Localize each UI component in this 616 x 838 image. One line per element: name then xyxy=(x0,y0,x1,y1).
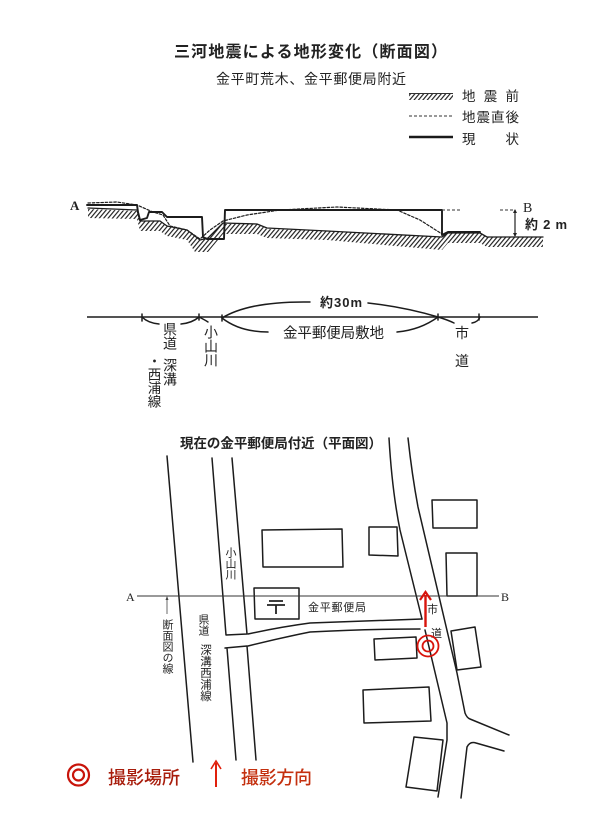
prefectural road label xyxy=(197,614,212,702)
legend: just after earthquake: 地震直後 xyxy=(462,110,520,125)
post office building xyxy=(254,588,299,619)
city road label: 市 xyxy=(427,603,438,616)
label B: B xyxy=(501,590,509,604)
section line pointer xyxy=(166,596,168,614)
dimension arcs xyxy=(142,302,480,332)
prefectural road label: 深溝 xyxy=(162,358,178,386)
post office label: 金平郵便局 xyxy=(308,601,366,614)
height marker xyxy=(513,209,517,237)
prefectural road label: 県道 xyxy=(197,614,210,636)
city road label: 道 xyxy=(431,626,442,640)
red arrow: shooting direction xyxy=(420,592,431,627)
width label: 約30m xyxy=(320,295,362,310)
road lower xyxy=(225,646,256,760)
site label: 金平郵便局敷地 xyxy=(283,324,384,342)
plan title: 現在の金平郵便局付近（平面図） xyxy=(180,435,382,451)
title: 三河地震による地形変化（断面図） xyxy=(174,42,447,61)
legend: present state: 現状 xyxy=(462,132,520,147)
photo key xyxy=(68,761,312,788)
legend xyxy=(409,88,520,147)
present state line xyxy=(87,205,480,239)
ground line: before earthquake xyxy=(88,208,543,240)
section line label: 断面図の線 xyxy=(161,619,174,674)
key label: position: 撮影場所 xyxy=(108,768,180,788)
city road label: 道 xyxy=(455,353,469,369)
ground hatching: before earthquake xyxy=(88,209,543,252)
city road label xyxy=(455,325,469,369)
prefectural road label: 県道 xyxy=(162,322,178,351)
key icon: position xyxy=(68,764,89,786)
plan map xyxy=(126,438,509,798)
river upper xyxy=(212,458,247,635)
cross-section profile chart xyxy=(70,198,567,252)
label A: A xyxy=(126,590,135,604)
A-B section line xyxy=(137,595,499,597)
prefectural road label: 深溝西浦線 xyxy=(199,643,212,702)
buildings xyxy=(262,500,481,791)
section key line xyxy=(87,295,538,408)
label B: B xyxy=(523,201,532,216)
subtitle: 金平町荒木、金平郵便局附近 xyxy=(216,71,406,87)
baseline xyxy=(87,316,538,318)
city road right edge xyxy=(408,438,509,735)
post office symbol xyxy=(267,601,285,614)
dashed extension to B xyxy=(442,209,515,211)
just after earthquake dashed line xyxy=(88,202,442,239)
legend: before earthquake: 地震前 xyxy=(462,88,519,104)
city road label xyxy=(427,603,442,640)
label A: A xyxy=(70,198,80,213)
city road label: 市 xyxy=(455,325,469,341)
height label: 約 2 m xyxy=(525,217,567,232)
prefectural road label xyxy=(146,322,178,408)
prefectural road label: ・西浦線 xyxy=(146,354,161,408)
city road left edge xyxy=(389,438,447,797)
key icon: direction arrow xyxy=(211,761,221,787)
river label: 小山川 xyxy=(224,547,236,580)
left road edge xyxy=(167,456,193,762)
branch road xyxy=(461,742,504,798)
key label: direction: 撮影方向 xyxy=(241,768,312,788)
side street xyxy=(248,619,422,646)
red double circle: shooting position xyxy=(418,636,438,656)
Oyama river label: 小山川 xyxy=(203,325,219,367)
